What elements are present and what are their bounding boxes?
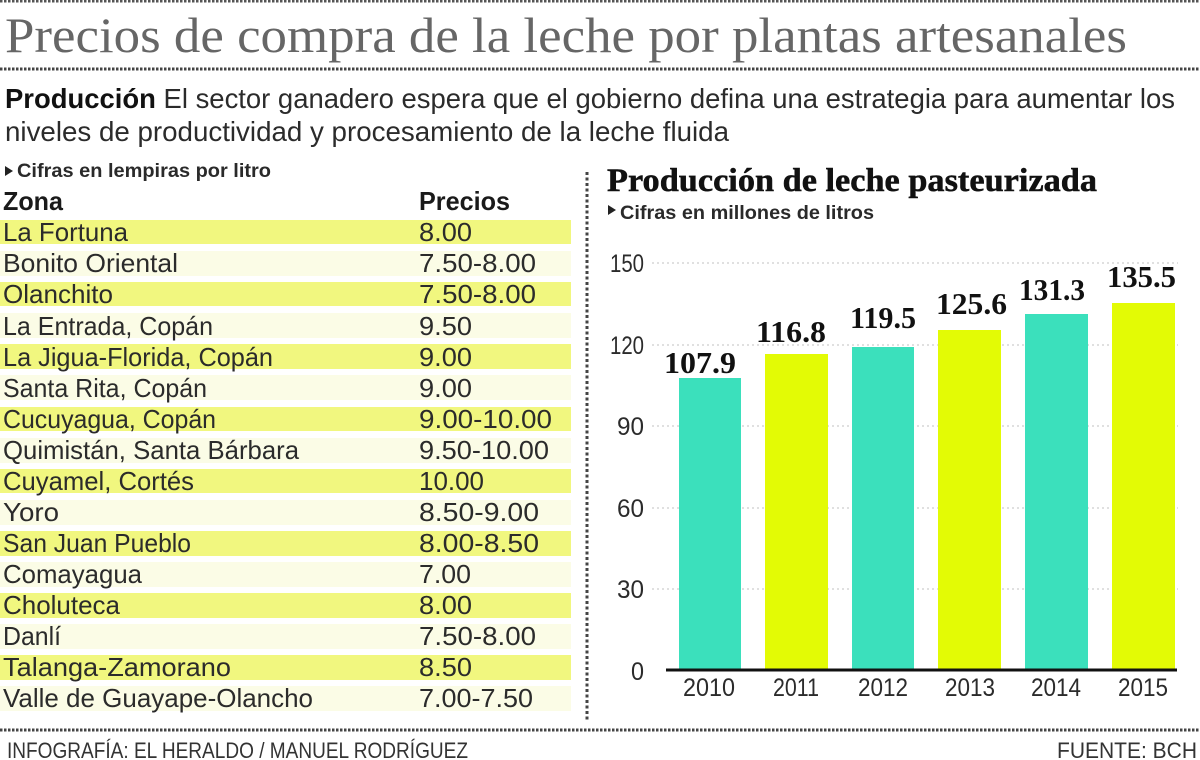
- gridlines: [652, 263, 1178, 589]
- table rows: San Juan Pueblo: [3, 528, 191, 558]
- intro text: niveles de productividad y procesamiento de la leche fluida: [5, 116, 729, 147]
- table rows: 8.50: [419, 652, 472, 682]
- bar 2012: [850, 300, 916, 669]
- table rows: La Fortuna: [3, 217, 129, 247]
- y axis labels: 0: [631, 658, 644, 686]
- bar 2013: 125.6: [936, 286, 1007, 321]
- table header: Zona: [3, 186, 64, 216]
- x axis labels: [683, 674, 1168, 702]
- table rows: 8.00: [419, 590, 472, 620]
- bar 2013: [936, 286, 1007, 669]
- table header: [3, 186, 510, 216]
- table rows: Cuyamel, Cortés: [3, 466, 194, 496]
- intro text: Producción El sector ganadero espera que el gobierno defina una estrategia para aumentar los: [5, 83, 1175, 114]
- price table: [0, 186, 571, 713]
- table rows: 9.50: [419, 311, 472, 341]
- chart subtitle: Cifras en millones de litros: [620, 203, 874, 224]
- row bands: [0, 220, 571, 711]
- table rows: 8.50-9.00: [419, 497, 539, 527]
- y axis labels: 30: [617, 576, 644, 604]
- title: Precios de compra de la leche por plantas artesanales: [5, 7, 1127, 63]
- chart title: Producción de leche pasteurizada: [607, 163, 1097, 199]
- table rows: Quimistán, Santa Bárbara: [3, 435, 300, 465]
- table rows: 7.50-8.00: [419, 621, 536, 651]
- bar 2011: [756, 314, 828, 669]
- y axis labels: 60: [617, 495, 644, 523]
- x axis labels: 2015: [1118, 674, 1168, 702]
- table rows: Yoro: [3, 497, 59, 527]
- bar 2014: [1019, 272, 1088, 669]
- table rows: Bonito Oriental: [3, 248, 178, 278]
- x axis labels: 2013: [945, 674, 995, 702]
- bar 2011: 116.8: [756, 314, 826, 349]
- bar 2012: 119.5: [850, 300, 916, 335]
- table subtitle: Cifras en lempiras por litro: [17, 161, 271, 182]
- table rows: Danlí: [3, 621, 62, 651]
- table rows: Santa Rita, Copán: [3, 373, 207, 403]
- y axis labels: 150: [610, 250, 644, 278]
- table rows: 7.00: [419, 559, 471, 589]
- table rows: 7.50-8.00: [419, 248, 536, 278]
- y axis labels: 90: [617, 413, 644, 441]
- table rows: La Entrada, Copán: [3, 311, 213, 341]
- x axis labels: 2012: [858, 674, 908, 702]
- bar 2014: 131.3: [1019, 272, 1085, 307]
- table rows: Comayagua: [3, 559, 143, 589]
- x axis labels: 2010: [683, 674, 735, 702]
- table rows: Talanga-Zamorano: [3, 652, 231, 682]
- table rows: 8.00: [419, 217, 472, 247]
- table rows: 10.00: [419, 466, 484, 496]
- table rows: 7.50-8.00: [419, 279, 536, 309]
- x axis labels: 2014: [1031, 674, 1081, 702]
- table rows: 8.00-8.50: [419, 528, 539, 558]
- table rows: Cucuyagua, Copán: [3, 404, 216, 434]
- table rows: La Jigua-Florida, Copán: [3, 342, 273, 372]
- table rows: Olanchito: [3, 279, 113, 309]
- table rows: 9.50-10.00: [419, 435, 549, 465]
- bar 2015: 135.5: [1107, 259, 1176, 294]
- table rows: 9.00-10.00: [419, 404, 552, 434]
- bar 2010: 107.9: [664, 345, 736, 380]
- table rows: [3, 217, 552, 713]
- table header: Precios: [419, 186, 510, 216]
- table rows: 9.00: [419, 373, 472, 403]
- y axis labels: [610, 250, 644, 686]
- table rows: Choluteca: [3, 590, 121, 620]
- table rows: 9.00: [419, 342, 472, 372]
- bar 2010: [664, 345, 741, 669]
- table rows: Valle de Guayape-Olancho: [3, 683, 313, 713]
- bar chart: [610, 250, 1178, 702]
- x axis labels: 2011: [773, 674, 819, 702]
- table rows: 7.00-7.50: [419, 683, 533, 713]
- intro text: [5, 83, 1175, 147]
- y axis labels: 120: [610, 332, 644, 360]
- bar 2015: [1107, 259, 1176, 669]
